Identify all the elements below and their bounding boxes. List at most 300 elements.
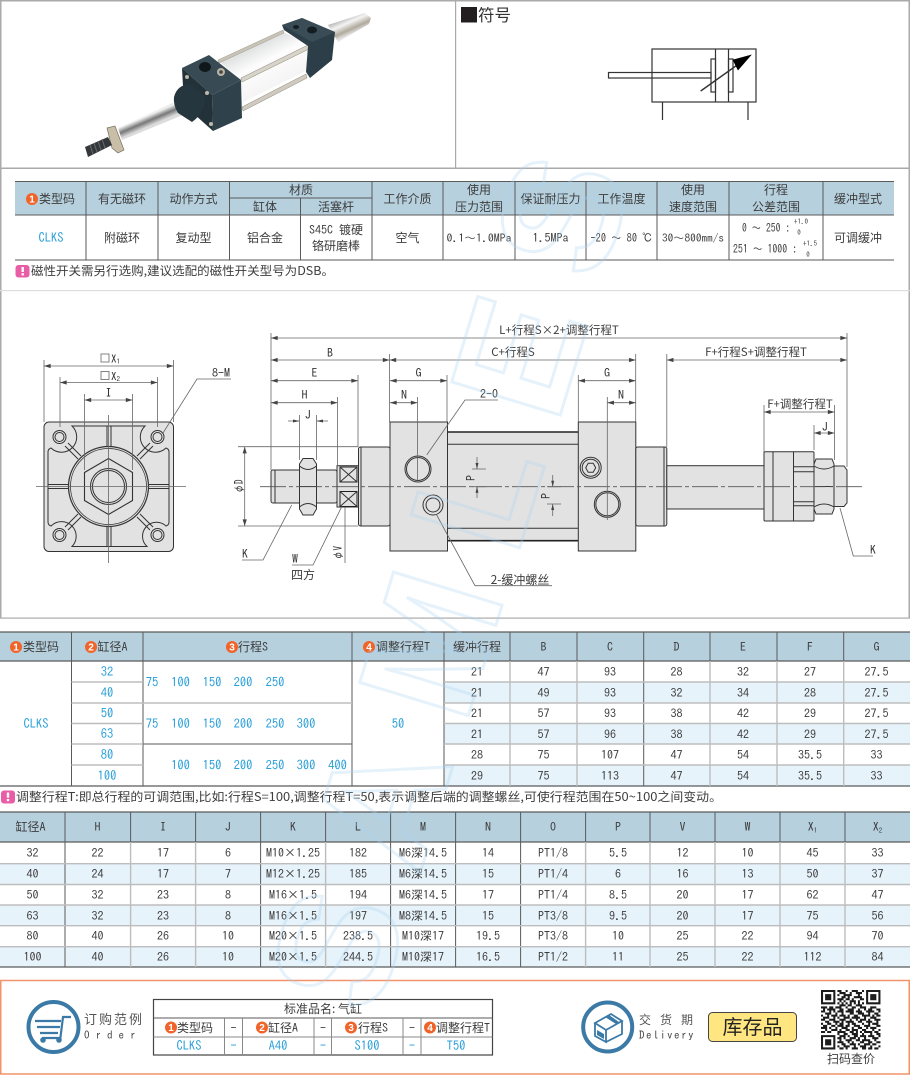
side view labels: B — [327, 347, 333, 359]
table 2 dimension values: 34 — [737, 687, 749, 699]
side view labels: E — [312, 367, 318, 379]
delivery label: 交货期 — [639, 1011, 702, 1028]
spec table header — [15, 181, 894, 260]
table 2 header: 类型码 — [23, 638, 59, 655]
icon: delivery box — [583, 1002, 632, 1052]
table 2 model, bore, stroke values: 32 — [101, 665, 113, 678]
table 2 dimension values: 107 — [601, 749, 619, 761]
table 2 dimension values: 75 — [538, 749, 550, 761]
table 2 model, bore, stroke values: 100 — [171, 676, 190, 688]
order example table: - — [320, 1039, 326, 1052]
table 2 header — [0, 632, 910, 786]
table 2 dimension values: 38 — [670, 728, 682, 740]
table 2 header: C — [607, 641, 613, 653]
table 3 values: 22 — [92, 847, 104, 859]
side view labels: φV — [332, 546, 344, 560]
spec table header: 缓冲型式 — [834, 190, 882, 207]
table 3 values: 17 — [742, 910, 754, 922]
table 2 header: B — [540, 641, 546, 653]
table 2 model, bore, stroke values: 100 — [171, 717, 190, 730]
table 3 values: 6 — [615, 868, 621, 880]
table 2 dimension values: 32 — [737, 666, 749, 678]
symbol heading — [461, 2, 511, 26]
table 3 values: 15 — [482, 868, 494, 880]
table 3 values: 10 — [222, 951, 234, 963]
table 3 values: 26 — [157, 930, 169, 942]
table 3 header — [0, 812, 910, 967]
table 2 model, bore, stroke values: 150 — [203, 676, 221, 688]
order example table: S100 — [354, 1039, 380, 1052]
table 2 dimension values: 21 — [471, 666, 483, 678]
side view labels: K — [870, 544, 876, 556]
spec table values: 251 ～ 1000 : — [733, 244, 797, 255]
table: dimensions by bore — [0, 812, 910, 967]
side view labels: P — [465, 475, 477, 481]
table 3 header: P — [615, 821, 621, 833]
side view labels: P — [540, 493, 552, 499]
table 2 dimension values: 93 — [604, 666, 616, 678]
table 3 header: K — [290, 821, 296, 833]
table 3 values: 15 — [482, 910, 494, 922]
table 3 row stripes — [0, 864, 910, 967]
table 3 values: 22 — [742, 930, 754, 942]
table 3 values: 17 — [157, 847, 169, 859]
table 2 dimension values: 27.5 — [864, 687, 888, 699]
table 2 dimension values: 47 — [670, 770, 682, 782]
text: SAMLES — [233, 99, 677, 1028]
spec table values: 空气 — [395, 229, 420, 246]
spec table header: 1 — [29, 194, 35, 206]
table 2 dimension values: 42 — [737, 728, 749, 740]
order example table: 2 — [259, 1023, 265, 1034]
table 2 model, bore, stroke values: 100 — [98, 769, 116, 782]
footer panel — [1, 980, 909, 1074]
table 2 model, bore, stroke values: 200 — [234, 758, 252, 772]
front view dimensions — [44, 354, 231, 470]
table 3 values: PT1/8 — [538, 846, 568, 859]
cylinder body side view — [260, 422, 862, 551]
spec table header: 工作温度 — [597, 190, 646, 207]
table 2 model, bore, stroke values: 80 — [101, 748, 113, 761]
in-stock badge — [708, 1011, 796, 1042]
table 3 header: M — [420, 821, 426, 833]
table 2 model, bore, stroke values: 250 — [266, 758, 284, 772]
spec table values — [38, 218, 882, 258]
front view dimensions: X — [111, 354, 116, 365]
table 3 values: 75 — [806, 910, 818, 922]
table 2 dimension values: 27.5 — [864, 708, 888, 720]
table 3 values: 16.5 — [476, 951, 500, 963]
spec table header: 有无磁环 — [98, 190, 146, 207]
table 3 values: M16×1.5 — [269, 889, 317, 901]
table 3 header: L — [355, 821, 361, 833]
side view drawing — [233, 322, 876, 588]
table 3 header: W — [744, 821, 750, 833]
order example table — [154, 1000, 492, 1055]
table 3 values: 24 — [92, 868, 104, 880]
spec table header: 保证耐压力 — [520, 190, 581, 207]
delivery label: Delivery — [639, 1030, 695, 1041]
panel frame — [0, 0, 910, 619]
table: model, bore, stroke and dimensions B-G — [0, 632, 910, 786]
icon: front end block — [182, 55, 242, 131]
delivery label — [639, 1011, 702, 1041]
table 2 dimension values: 42 — [737, 708, 749, 720]
table 3 values: 197 — [349, 910, 367, 922]
table 2 dimension values: 54 — [737, 770, 749, 782]
table 3 values: 7 — [225, 868, 231, 880]
front view plate — [36, 415, 186, 563]
spec table values: 0.1～1.0MPa — [446, 233, 512, 244]
table 2 dimension values: 47 — [670, 749, 682, 761]
spec table header: 类型码 — [39, 190, 75, 207]
table 3 values: 62 — [806, 889, 818, 901]
side view labels: F+行程S+调整行程T — [705, 344, 807, 360]
front view dimensions: X — [111, 372, 116, 382]
table 3 values: 37 — [872, 868, 884, 880]
table 3 values: 13 — [742, 868, 754, 880]
order example table: - — [409, 1039, 415, 1052]
table 2 dimension values: 96 — [604, 728, 616, 740]
spec table header: 压力范围 — [455, 198, 503, 215]
table 2 dimension values: 28 — [670, 666, 682, 678]
side view labels: 2-缓冲螺丝 — [491, 571, 549, 588]
table 2 dimension values: 93 — [604, 708, 616, 720]
table 3 header: H — [94, 821, 100, 833]
spec table header: 动作方式 — [169, 190, 218, 207]
side view labels: C+行程S — [491, 344, 535, 360]
table 2 header: 缓冲行程 — [453, 638, 501, 655]
spec table header: 材质 — [289, 181, 313, 198]
table 3 values: 17 — [157, 868, 169, 880]
table 3 values: 25 — [676, 930, 688, 942]
table 3 values: 17 — [482, 889, 494, 901]
table 3 values: 100 — [24, 951, 42, 963]
table 2 dimension values — [471, 666, 888, 782]
note: magnetic switch: 磁性开关需另行选购,建议选配的磁性开关型号为DSB。 — [31, 262, 334, 279]
order example table: - — [409, 1022, 415, 1034]
order example table: 标准品名: 气缸 — [284, 1000, 362, 1017]
side view labels: N — [618, 389, 624, 401]
table 2 dimension values: 93 — [604, 687, 616, 699]
table 3 values: 244.5 — [343, 951, 373, 963]
table 3 values: PT1/2 — [538, 950, 568, 963]
table 3 values: 185 — [349, 868, 367, 880]
table 2 dimension values: 32 — [670, 687, 682, 699]
order example table: - — [230, 1039, 237, 1052]
table 2 dimension values: 21 — [471, 708, 483, 720]
spec table values: +1.0 — [794, 218, 808, 225]
table 3 values: 17 — [742, 889, 754, 901]
table 2 model, bore, stroke values: 300 — [297, 717, 315, 730]
table 2 row stripes — [444, 682, 910, 786]
table 3 values: 25 — [676, 951, 688, 963]
table 3 values: M20×1.5 — [269, 930, 317, 942]
table 2 model, bore, stroke values: 400 — [328, 758, 347, 772]
spec table values: 铝合金 — [247, 229, 283, 246]
table 2 header: E — [740, 641, 746, 653]
table 2 header: 行程S — [238, 638, 268, 655]
table 3 header: N — [485, 821, 491, 833]
table 2 dimension values: 27.5 — [864, 728, 888, 740]
table 2 dimension values: 21 — [471, 728, 483, 740]
table 2 dimension values: 28 — [804, 687, 816, 699]
spec table values: 复动型 — [175, 229, 212, 246]
spec table header: 缸体 — [253, 198, 277, 215]
spec table values: CLKS — [38, 231, 64, 244]
table 3 values: M16×1.5 — [269, 910, 317, 922]
table 3 header: X — [808, 821, 814, 833]
table 3 values: 23 — [157, 910, 169, 922]
table 3 values: 80 — [26, 930, 38, 942]
order example table: A40 — [269, 1039, 287, 1052]
table 3 values: 40 — [26, 868, 38, 880]
table 2 dimension values: 27.5 — [864, 666, 888, 678]
side view labels: L+行程S×2+调整行程T — [499, 322, 619, 338]
order label: Order — [84, 1030, 142, 1041]
table 2 dimension values: 28 — [471, 749, 483, 761]
table 3 values: 23 — [157, 889, 169, 901]
icon: shopping cart — [28, 1002, 78, 1052]
table 3 values: PT3/8 — [538, 909, 568, 922]
order example table: - — [230, 1022, 236, 1034]
table 2 dimension values: 49 — [538, 687, 550, 699]
front view dimensions: 2 — [116, 376, 120, 382]
order example table: 调整行程T — [436, 1019, 490, 1036]
table 3 values: 22 — [742, 951, 754, 963]
side view labels: 四方 — [291, 566, 315, 583]
table 2 dimension values: 29 — [804, 728, 816, 740]
table 2 model, bore, stroke values: CLKS — [24, 717, 48, 730]
spec table values: -20 ～ 80 ℃ — [590, 232, 652, 244]
table 3 values: 70 — [872, 930, 884, 942]
table 3 values: 20 — [676, 910, 688, 922]
side view dimension lines — [238, 333, 873, 586]
front view drawing — [36, 354, 231, 563]
spec table header: 行程 — [764, 181, 788, 198]
table 2 model, bore, stroke values: 200 — [234, 717, 252, 730]
side view labels: W — [292, 553, 298, 565]
table 3 values — [24, 846, 884, 963]
table 3 values: 63 — [26, 910, 38, 922]
side view labels: 2-O — [480, 388, 498, 400]
table 3 values: M6深14.5 — [399, 847, 447, 859]
table 3 values: 20 — [676, 889, 688, 901]
table 2 dimension values: 35.5 — [798, 770, 822, 782]
table 3 values: 11 — [612, 951, 624, 963]
front view dimensions: 1 — [116, 358, 120, 365]
table 2 dimension values: 29 — [804, 708, 816, 720]
spec table values: 0 ～ 250 : — [742, 223, 790, 234]
table 2 dimension values: 54 — [737, 749, 749, 761]
table 2 model, bore, stroke values: 200 — [234, 676, 252, 688]
spec table values: 0 — [797, 229, 801, 236]
spec table values: 30～800mm/s — [662, 232, 724, 244]
table 2 model, bore, stroke values: 50 — [101, 706, 113, 720]
table 3 values: 40 — [92, 951, 104, 963]
table 3 values: 26 — [157, 951, 169, 963]
table 3 values: 5.5 — [609, 847, 627, 859]
table 2 dimension values: 57 — [538, 708, 550, 720]
spec table values: 1.5MPa — [532, 232, 568, 244]
table 2 dimension values: 47 — [538, 666, 550, 678]
order example table: - — [320, 1022, 326, 1034]
spec table values: 铬研磨棒 — [312, 237, 360, 254]
front view dimensions: 8-M — [212, 367, 230, 379]
side view labels: G — [604, 367, 610, 379]
table 3 values: PT3/8 — [538, 929, 568, 942]
spec table values: S45C 镀硬 — [309, 221, 363, 238]
table 3 header: 缸径A — [16, 818, 46, 835]
icon: rear end block — [282, 18, 335, 78]
table 3 values: M6深14.5 — [399, 889, 447, 901]
table 3 values: 16 — [676, 868, 688, 880]
table 3 values: PT1/4 — [538, 888, 568, 901]
spec table header: 工作介质 — [383, 190, 432, 207]
spec table values: 0 — [806, 251, 810, 258]
table 3 header: O — [550, 821, 556, 833]
table 2 model, bore, stroke values: 150 — [203, 758, 221, 772]
table 3 values: 56 — [872, 910, 884, 922]
table 2 model, bore, stroke values: 100 — [171, 758, 190, 772]
table 2 model, bore, stroke values: 150 — [203, 717, 221, 730]
table 2 header: D — [674, 641, 680, 653]
table 2 dimension values: 113 — [601, 770, 619, 782]
table 3 values: M10×1.25 — [266, 847, 320, 859]
spec table header: 公差范围 — [752, 198, 800, 215]
in-stock badge: 库存品 — [722, 1011, 782, 1040]
order example table: 类型码 — [177, 1019, 213, 1036]
table 3 header: I — [160, 821, 166, 833]
table 2 dimension values: 33 — [870, 749, 882, 761]
side view labels: K — [242, 548, 248, 560]
table 2 header: 3 — [229, 642, 235, 654]
spec table header: 使用 — [681, 181, 705, 198]
cylinder symbol diagram — [608, 49, 756, 120]
table 3 values: 32 — [26, 847, 38, 859]
QR code — [821, 990, 880, 1067]
table 3 values: 10 — [222, 930, 234, 942]
table 2 dimension values: 57 — [538, 728, 550, 740]
table 3 values: 32 — [92, 910, 104, 922]
table 3 values: 50 — [806, 868, 818, 880]
table 2 header: 调整行程T — [376, 638, 430, 655]
table 2 model, bore, stroke values: 75 — [146, 676, 158, 688]
table 2 header: 缸径A — [98, 638, 128, 655]
side view labels: G — [416, 367, 422, 379]
table 3 values: 32 — [92, 889, 104, 901]
symbol heading: 符号 — [478, 2, 511, 26]
table 3 values: 112 — [804, 951, 822, 963]
table 3 values: M10深17 — [402, 930, 444, 942]
table 2 dimension values: 75 — [538, 770, 550, 782]
spec table values: 可调缓冲 — [834, 229, 882, 246]
order example table: 1 — [168, 1023, 174, 1034]
spec table — [15, 181, 894, 260]
table 3 values: 238.5 — [343, 930, 373, 942]
table 3 values: 194 — [349, 889, 367, 901]
table 3 values: 50 — [26, 889, 38, 901]
side view labels: J — [822, 421, 828, 433]
table 3 values: 8 — [225, 889, 231, 901]
table 2 header: 4 — [366, 642, 372, 654]
table 2 dimension values: 29 — [471, 770, 483, 782]
table 3 header: V — [680, 821, 686, 833]
order label: 订购范例 — [84, 1009, 144, 1028]
table 3 values: M20×1.5 — [269, 951, 317, 963]
order example table: 行程S — [358, 1019, 388, 1036]
table 3 header: 1 — [814, 827, 817, 834]
table 3 values: 8 — [225, 910, 231, 922]
side view labels: φD — [233, 480, 245, 494]
side view labels: J — [305, 409, 311, 421]
side view labels — [233, 322, 876, 588]
spec table values: 附磁环 — [104, 229, 140, 246]
table 2 model, bore, stroke values: 300 — [297, 758, 315, 772]
table 3 header: X — [873, 821, 879, 833]
table 3 values: 10 — [612, 930, 624, 942]
table 3 values: 19.5 — [476, 930, 500, 942]
table 3 values: M12×1.25 — [266, 868, 320, 880]
note: adjustable stroke: 调整行程T:即总行程的可调范围,比如:行程S=100,调整行程T=50,表示调整后端的调整螺丝,可使行程范围在50~100之间变动。 — [16, 788, 722, 805]
table 2 model, bore, stroke values: 40 — [101, 686, 113, 699]
table 3 values: 9.5 — [609, 910, 627, 922]
table 2 model, bore, stroke values — [24, 665, 404, 782]
table 2 model, bore, stroke values: 50 — [392, 717, 404, 730]
spec table header: 活塞杆 — [318, 198, 354, 215]
table 3 values: 45 — [806, 847, 818, 859]
order example table: T50 — [447, 1039, 465, 1052]
order example table: 4 — [427, 1023, 433, 1034]
table 3 values: 182 — [349, 847, 367, 859]
table 2 dimension values: 21 — [471, 687, 483, 699]
table 3 header: J — [225, 821, 231, 833]
table 3 values: 14 — [482, 847, 494, 859]
table 3 header: 2 — [879, 827, 883, 834]
table 3 values: 6 — [225, 847, 231, 859]
table 2 header: G — [874, 641, 880, 653]
table 3 values: 33 — [872, 847, 884, 859]
order example table: 缸径A — [268, 1019, 298, 1036]
table 2 model, bore, stroke values: 250 — [266, 676, 284, 688]
table 3 values: 8.5 — [609, 889, 627, 901]
table 2 dimension values: 27 — [804, 666, 816, 678]
table 2 model, bore, stroke values: 75 — [146, 717, 158, 730]
table 3 values: 40 — [92, 930, 104, 942]
table 2 header: 2 — [88, 642, 94, 654]
side view labels: F+调整行程T — [767, 396, 833, 412]
table 3 values: M10深17 — [402, 951, 444, 963]
table 2 model, bore, stroke values: 63 — [101, 727, 113, 740]
table 3 values: 10 — [742, 847, 754, 859]
spec table values: +1.5 — [803, 240, 818, 247]
order example table: CLKS — [176, 1039, 202, 1052]
table 2 dimension values: 33 — [870, 770, 882, 782]
table 3 values: 94 — [806, 930, 818, 942]
side view labels: N — [401, 389, 407, 401]
spec table header: 速度范围 — [669, 198, 717, 215]
product photo: pneumatic cylinder — [85, 13, 371, 157]
order label — [84, 1009, 144, 1041]
spec table header: 使用 — [467, 181, 491, 198]
table 2 dimension values: 35.5 — [798, 749, 822, 761]
QR code: 扫码查价 — [827, 1050, 875, 1067]
front view dimensions: I — [106, 387, 112, 399]
table 3 values: PT1/4 — [538, 867, 568, 880]
table 3 values: M6深14.5 — [399, 868, 447, 880]
table 2 header: 1 — [13, 642, 19, 654]
side view labels: H — [302, 389, 308, 401]
